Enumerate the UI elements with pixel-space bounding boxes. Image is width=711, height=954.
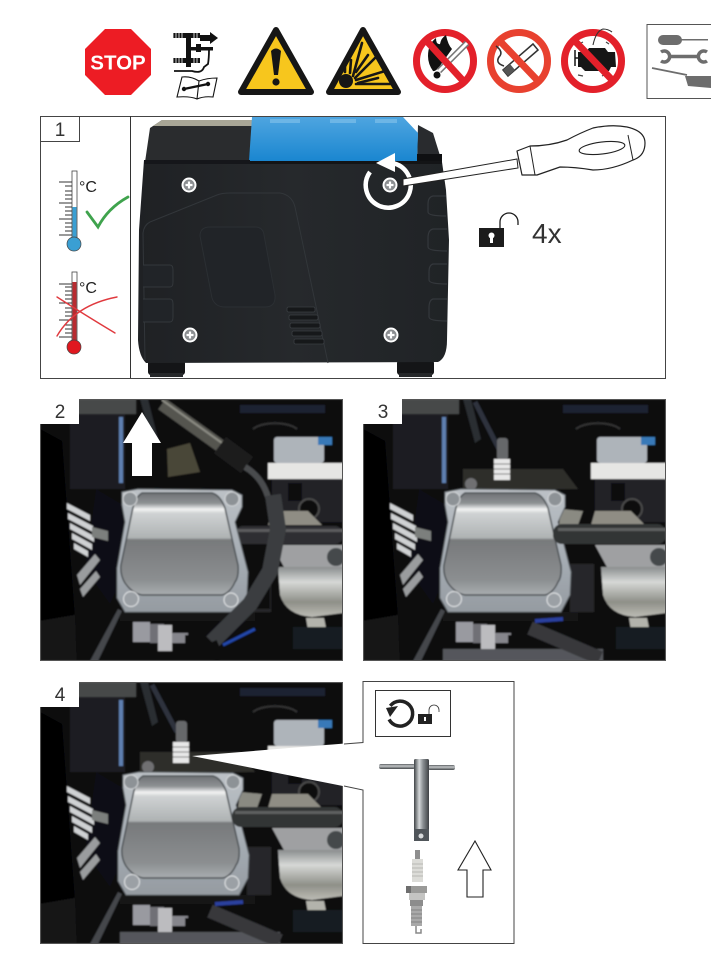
icon: cool thermometer with check <box>59 171 128 251</box>
icon: no open flame <box>416 32 474 90</box>
panel 3: connector removed <box>363 399 668 661</box>
icon: do not touch hot engine <box>564 29 622 90</box>
callout: spark plug removal detail <box>192 682 514 944</box>
icon: T-handle spark plug wrench <box>379 759 455 841</box>
step number 1: 1 <box>55 120 65 141</box>
arrow: outlined up <box>458 841 491 897</box>
generator housing <box>138 117 449 377</box>
icon box: unscrew direction <box>376 690 450 736</box>
screws <box>182 178 398 342</box>
icon: no smoking <box>490 32 548 90</box>
panel 1: unscrew cover when cool <box>40 116 666 378</box>
panel 2: pull off spark plug connector <box>40 399 345 661</box>
icon: open padlock <box>479 213 518 247</box>
icon: engine and manual <box>173 32 218 99</box>
step number 4: 4 <box>55 685 66 706</box>
step number 3: 3 <box>378 402 388 423</box>
icon: hot thermometer crossed out <box>57 272 117 354</box>
step number 2 <box>40 399 79 424</box>
icon: stop sign: STOP <box>90 52 146 74</box>
step number 4 <box>40 682 79 707</box>
arrow: counterclockwise rotation <box>366 153 411 208</box>
icon: hot thermometer crossed out: °C <box>79 280 97 297</box>
text: four times: 4x <box>532 218 562 249</box>
panel 4: unscrew spark plug <box>40 682 345 944</box>
icon: screwdriver <box>403 126 645 186</box>
step number 1 <box>40 116 80 142</box>
arrow: pull up <box>123 412 161 476</box>
icon: general warning triangle <box>241 30 311 92</box>
icon: stop sign <box>85 29 151 95</box>
step number 2: 2 <box>55 402 65 423</box>
icon: spark plug <box>406 850 427 933</box>
icon: explosive warning triangle <box>329 30 398 92</box>
icon: tools box <box>647 24 711 98</box>
step number 3 <box>363 399 402 424</box>
icon: cool thermometer with check: °C <box>79 179 97 196</box>
